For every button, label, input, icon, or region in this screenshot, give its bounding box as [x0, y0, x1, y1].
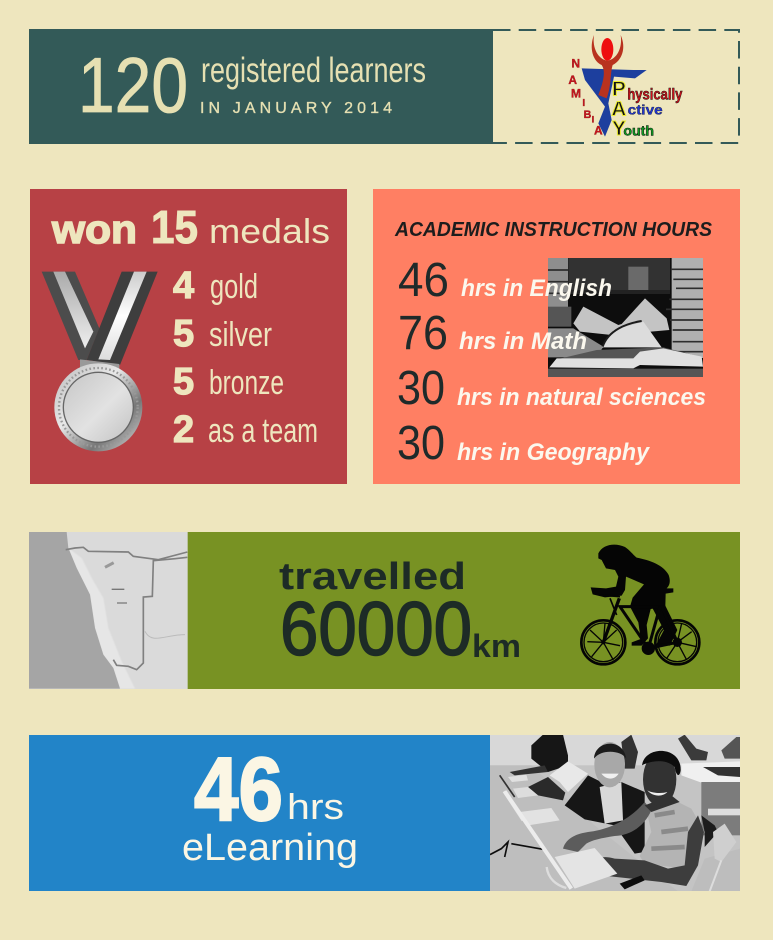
logo: Namibia PAY: M	[571, 86, 581, 100]
panel: travelled	[29, 532, 740, 689]
panel: logo dashed frame	[493, 30, 739, 143]
heading: academic instruction hours: ACADEMIC INSTRUCTION HOURS	[394, 219, 713, 241]
list: medal counts: 5	[173, 361, 194, 403]
logo: Namibia PAY: N	[571, 57, 580, 71]
logo: Namibia PAY: A	[594, 124, 603, 138]
logo: Namibia PAY: A	[611, 97, 626, 120]
heading: won 15 medals: 15	[151, 201, 198, 253]
list: medal counts: 4	[173, 265, 194, 307]
list: hours numbers: 30	[397, 362, 445, 415]
number: 46: 46	[194, 740, 283, 840]
panel: academic instruction hours	[373, 189, 740, 484]
icon: medal	[42, 272, 158, 451]
panel: eLearning	[29, 735, 740, 891]
logo: Namibia PAY: I	[582, 98, 585, 109]
list: hours numbers: 46	[398, 254, 449, 307]
heading: won 15 medals	[51, 201, 330, 253]
list: hours numbers: 76	[398, 307, 448, 360]
logo: Namibia PAY: Y	[612, 117, 626, 140]
text: hrs: hrs	[287, 786, 344, 827]
heading: won 15 medals: medals	[209, 213, 330, 251]
list: medal counts: gold	[210, 268, 258, 306]
logo: Namibia PAY	[568, 35, 683, 140]
heading: won 15 medals: won	[51, 208, 137, 252]
logo: Namibia PAY: B	[584, 109, 592, 121]
text: eLearning: eLearning	[182, 827, 358, 869]
text: in January 2014: IN JANUARY 2014	[200, 100, 392, 117]
logo: Namibia PAY: P	[612, 77, 626, 100]
list: hours subjects: hrs in English	[461, 275, 612, 302]
list: medal counts: 5	[173, 313, 194, 355]
photo: books	[548, 258, 703, 377]
number: 120: 120	[78, 41, 188, 129]
photo: teacher and student at laptops	[490, 735, 740, 891]
list: hours numbers	[397, 254, 449, 470]
number: 60000 km: 60000	[280, 587, 472, 672]
list: medal counts	[173, 265, 318, 451]
list: hours subjects: hrs in Geography	[457, 439, 651, 466]
list: hours numbers: 30	[397, 417, 445, 470]
list: medal counts: silver	[209, 316, 272, 354]
text: registered learners: registered learners	[201, 51, 426, 90]
logo: Namibia PAY: ctive	[628, 101, 663, 117]
map: Namibia	[29, 532, 188, 689]
logo: Namibia PAY: A	[568, 73, 577, 87]
panel: registered learners	[29, 29, 493, 144]
logo: Namibia PAY: outh	[623, 122, 654, 138]
text: travelled: travelled	[279, 556, 466, 598]
list: medal counts: as a team	[208, 412, 318, 450]
panel: medals	[30, 189, 347, 484]
list: medal counts: bronze	[209, 364, 284, 402]
list: hours subjects: hrs in natural sciences	[457, 384, 706, 411]
icon: cyclist	[581, 545, 699, 664]
number: 60000 km: km	[472, 628, 521, 664]
logo: Namibia PAY: hysically	[627, 86, 683, 103]
list: medal counts: 2	[173, 409, 194, 451]
list: hours subjects	[457, 275, 706, 466]
logo: Namibia PAY: I	[592, 115, 594, 125]
list: hours subjects: hrs in Math	[459, 328, 587, 355]
